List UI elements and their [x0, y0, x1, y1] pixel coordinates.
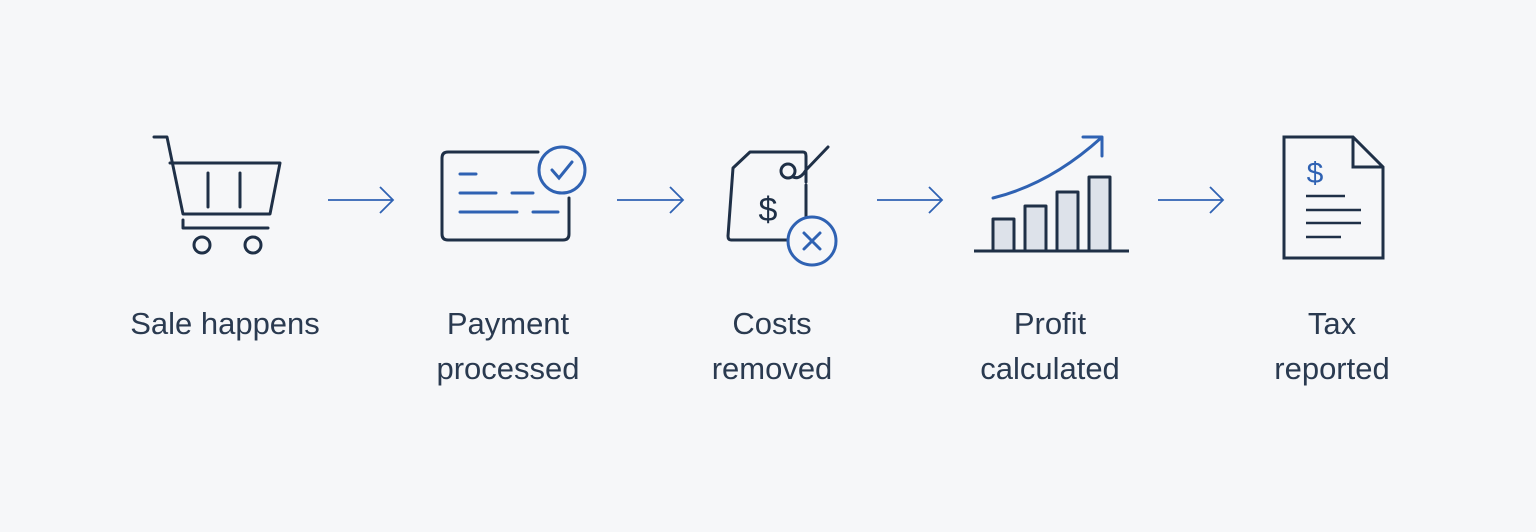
- label: profit calculated: Profit: [1014, 306, 1087, 341]
- label: payment processed: Payment: [447, 306, 570, 341]
- label: sale happens: Sale happens: [130, 306, 320, 341]
- label: costs removed: Costs: [732, 306, 812, 341]
- icon: payment card: [442, 147, 585, 240]
- text: calculated: [980, 351, 1120, 386]
- arrow 2: [617, 187, 683, 213]
- icon: profit chart: [974, 137, 1129, 251]
- text: processed: [436, 351, 580, 386]
- text: removed: [712, 351, 832, 386]
- arrow 3: [877, 187, 942, 213]
- label: tax reported: Tax: [1308, 306, 1357, 341]
- icon: price tag with remove: [728, 147, 836, 265]
- icon: tax document: $: [1307, 157, 1324, 190]
- icon: tax document: [1284, 137, 1383, 258]
- arrow 4: [1158, 187, 1223, 213]
- icon: price tag with remove: $: [759, 191, 778, 229]
- icon: shopping cart: [154, 137, 280, 253]
- text: reported: [1274, 351, 1390, 386]
- arrow 1: [328, 187, 393, 213]
